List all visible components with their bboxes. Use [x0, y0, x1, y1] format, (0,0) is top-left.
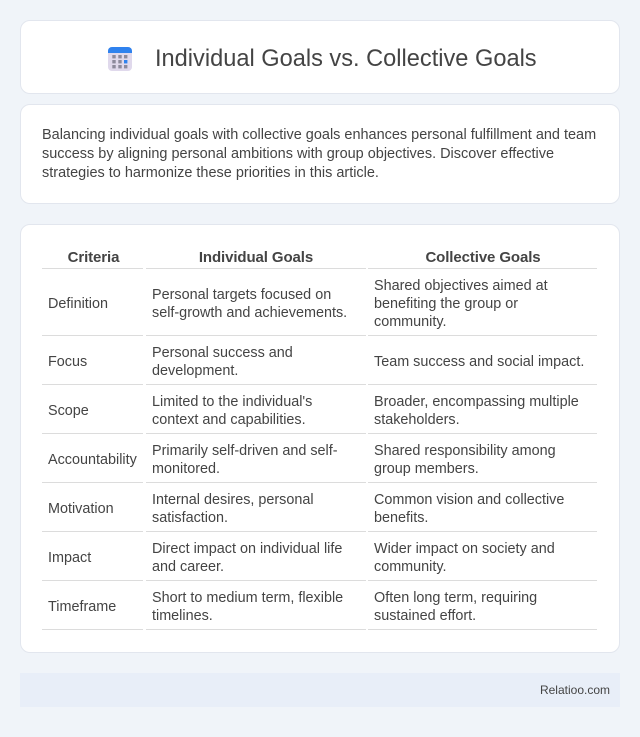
row: Motivation: Motivation [48, 501, 114, 517]
table: Internal desires, personal [152, 492, 314, 508]
table: Shared responsibility among [374, 443, 556, 459]
table: development. [152, 363, 238, 379]
table: Limited to the individual's [152, 394, 312, 410]
row: Timeframe: Timeframe [48, 599, 116, 615]
table [42, 249, 597, 630]
header: Criteria: Criteria [68, 249, 119, 266]
table: timelines. [152, 608, 213, 624]
table: monitored. [152, 461, 220, 477]
icon: calendar [108, 47, 132, 71]
table: Personal targets focused on [152, 287, 331, 303]
table: and career. [152, 559, 224, 575]
table: Direct impact on individual life [152, 541, 342, 557]
intro text: Balancing individual goals with collective goals enhances personal fulfillment and team [42, 127, 596, 143]
table: Primarily self-driven and self- [152, 443, 338, 459]
table: Team success and social impact. [374, 354, 584, 370]
table: benefiting the group or [374, 296, 518, 312]
title: Individual Goals vs. Collective Goals [155, 46, 537, 72]
table: Often long term, requiring [374, 590, 537, 606]
row: Definition: Definition [48, 296, 108, 312]
table: Common vision and collective [374, 492, 564, 508]
table: Broader, encompassing multiple [374, 394, 579, 410]
table: Personal success and [152, 345, 293, 361]
intro text: success by aligning personal ambitions with group objectives. Discover effective [42, 146, 554, 162]
panel: title card [20, 20, 620, 94]
footer text: Relatioo.com [540, 683, 610, 697]
row: Accountability: Accountability [48, 452, 137, 468]
table: group members. [374, 461, 479, 477]
table: Short to medium term, flexible [152, 590, 343, 606]
table: community. [374, 314, 447, 330]
table: self-growth and achievements. [152, 305, 347, 321]
table: stakeholders. [374, 412, 460, 428]
table: Wider impact on society and [374, 541, 555, 557]
table: sustained effort. [374, 608, 476, 624]
row: Impact: Impact [48, 550, 91, 566]
intro text: strategies to harmonize these priorities in this article. [42, 165, 379, 181]
footer bar [20, 673, 620, 707]
table: satisfaction. [152, 510, 228, 526]
intro text [42, 127, 596, 181]
row: Scope: Scope [48, 403, 89, 419]
table: benefits. [374, 510, 428, 526]
table: context and capabilities. [152, 412, 306, 428]
header: Collective Goals: Collective Goals [425, 249, 541, 266]
row: Focus: Focus [48, 354, 87, 370]
panel: introduction [20, 104, 620, 204]
table: community. [374, 559, 447, 575]
panel: comparison table [20, 224, 620, 653]
table: Shared objectives aimed at [374, 278, 548, 294]
header: Individual Goals: Individual Goals [199, 249, 313, 266]
